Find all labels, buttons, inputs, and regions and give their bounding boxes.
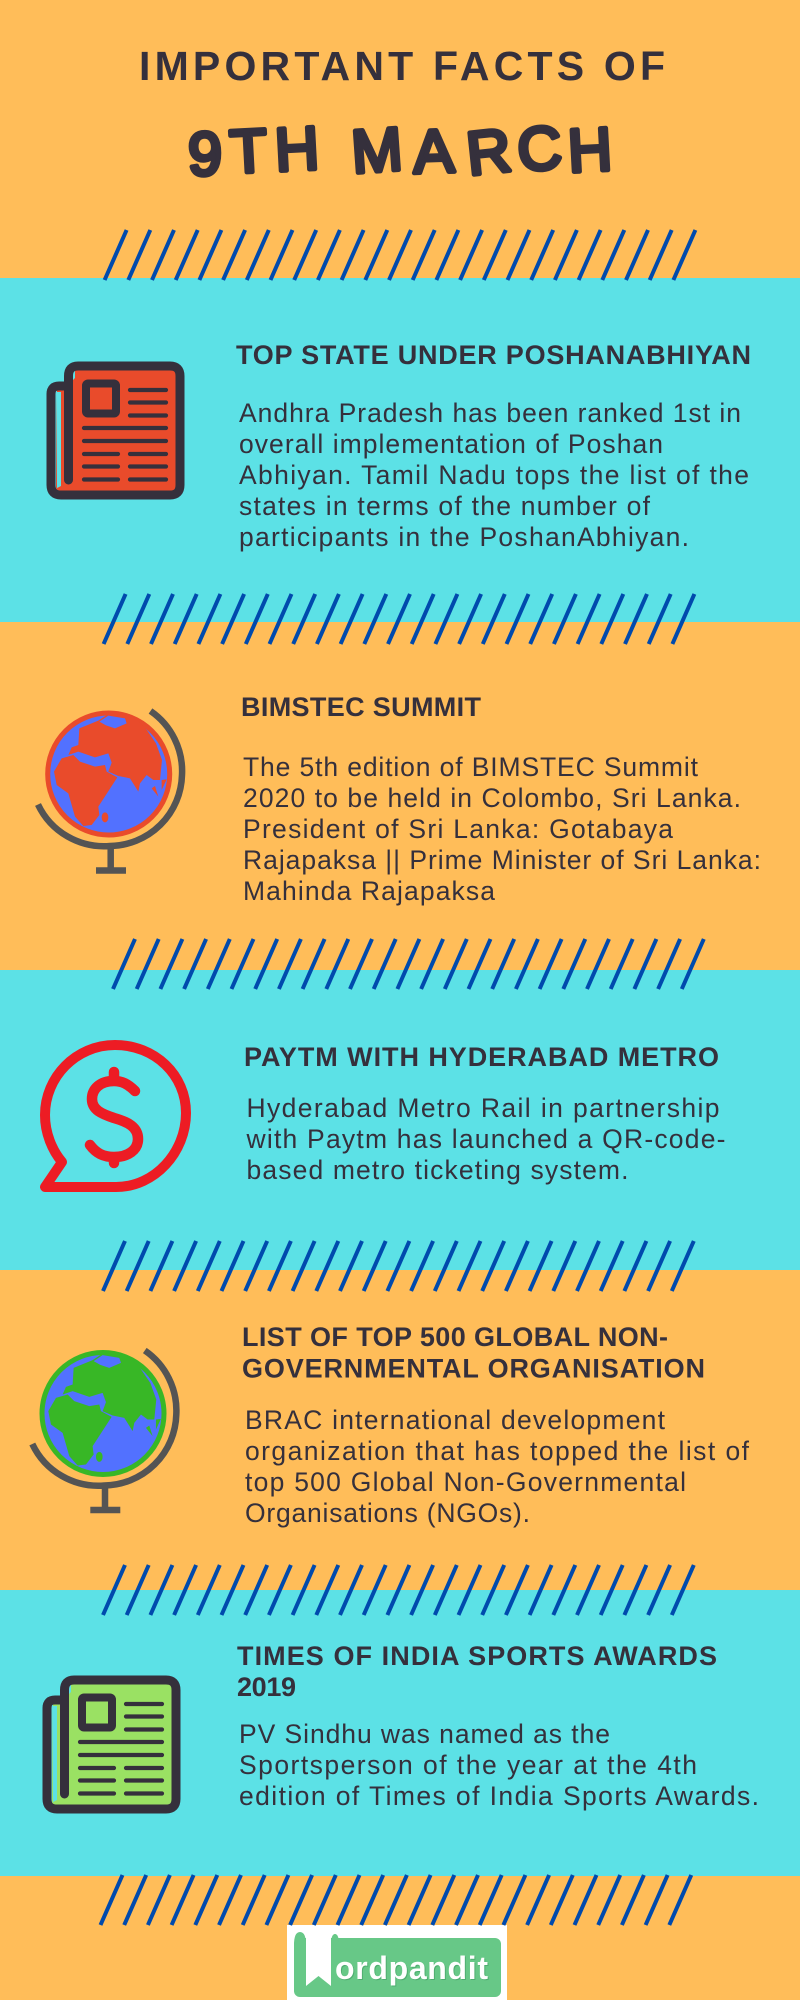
icon: dollar speech bubble (45, 1045, 186, 1187)
text block: brac: BRAC international development (245, 1405, 666, 1435)
text block: brac: top 500 Global Non-Governmental (245, 1467, 686, 1497)
text block: pv sindhu: PV Sindhu was named as the (239, 1719, 610, 1749)
heading: times of india: TIMES OF INDIA SPORTS AWARDS (237, 1641, 717, 1671)
panel: top state under poshanabhiyan (0, 278, 800, 622)
text block: paytm: based metro ticketing system. (246, 1155, 628, 1185)
title: important facts of: IMPORTANT FACTS OF (139, 43, 665, 89)
logo: wordpandit: ordpandit (335, 1950, 488, 1986)
text block: bimstec: Mahinda Rajapaksa (243, 876, 495, 906)
heading: top 500 ngos: GOVERNMENTAL ORGANISATION (242, 1354, 705, 1384)
icon: red newspaper (51, 366, 180, 495)
panel: bimstec summit (0, 622, 800, 970)
panel: paytm with hyderabad metro (0, 970, 800, 1270)
text block: pv sindhu: edition of Times of India Sports Awards. (239, 1781, 759, 1811)
panel: times of india sports awards (0, 1590, 800, 1876)
text block: paytm: with Paytm has launched a QR-code- (246, 1124, 726, 1154)
text block: poshan abhiyan: states in terms of the number of (239, 491, 651, 521)
text block: bimstec: Rajapaksa || Prime Minister of Sri Lanka: (243, 845, 761, 875)
heading: top 500 ngos: LIST OF TOP 500 GLOBAL NON- (242, 1322, 668, 1352)
text block: poshan abhiyan: Andhra Pradesh has been ranked 1st in (239, 398, 741, 428)
text block: bimstec: President of Sri Lanka: Gotabaya (243, 814, 673, 844)
panel: footer (0, 1876, 800, 2000)
logo: wordpandit (287, 1925, 507, 2000)
text block: brac: organization that has topped the list of (245, 1436, 750, 1466)
heading: top state: TOP STATE UNDER POSHANABHIYAN (236, 340, 751, 370)
text block: bimstec: The 5th edition of BIMSTEC Summit (243, 752, 699, 782)
text block: poshan abhiyan: Abhiyan. Tamil Nadu tops the list of the (239, 460, 749, 490)
heading: times of india: 2019 (237, 1672, 296, 1702)
text block: bimstec: 2020 to be held in Colombo, Sri Lanka. (243, 783, 741, 813)
text block: pv sindhu (239, 1719, 759, 1811)
icon: green globe (32, 1350, 176, 1510)
text block: poshan abhiyan: participants in the PoshanAbhiyan. (239, 522, 689, 552)
heading: paytm: PAYTM WITH HYDERABAD METRO (244, 1042, 719, 1072)
heading: times of india (237, 1641, 717, 1702)
panel: title header (0, 0, 800, 278)
icon: red globe (38, 711, 182, 870)
title: 9th march: 9TH MARCH (188, 113, 614, 188)
text block: paytm (246, 1093, 726, 1185)
text block: brac (245, 1405, 750, 1528)
icon: green newspaper (47, 1680, 176, 1809)
panel: list of top 500 global ngos (0, 1270, 800, 1590)
text block: pv sindhu: Sportsperson of the year at the 4th (239, 1750, 697, 1780)
text block: paytm: Hyderabad Metro Rail in partnership (246, 1093, 720, 1123)
heading: top 500 ngos (242, 1322, 705, 1384)
text block: poshan abhiyan: overall implementation of Poshan (239, 429, 663, 459)
text block: brac: Organisations (NGOs). (245, 1498, 530, 1528)
text block: poshan abhiyan (239, 398, 749, 552)
text block: bimstec (243, 752, 761, 906)
heading: bimstec summit: BIMSTEC SUMMIT (241, 692, 482, 722)
